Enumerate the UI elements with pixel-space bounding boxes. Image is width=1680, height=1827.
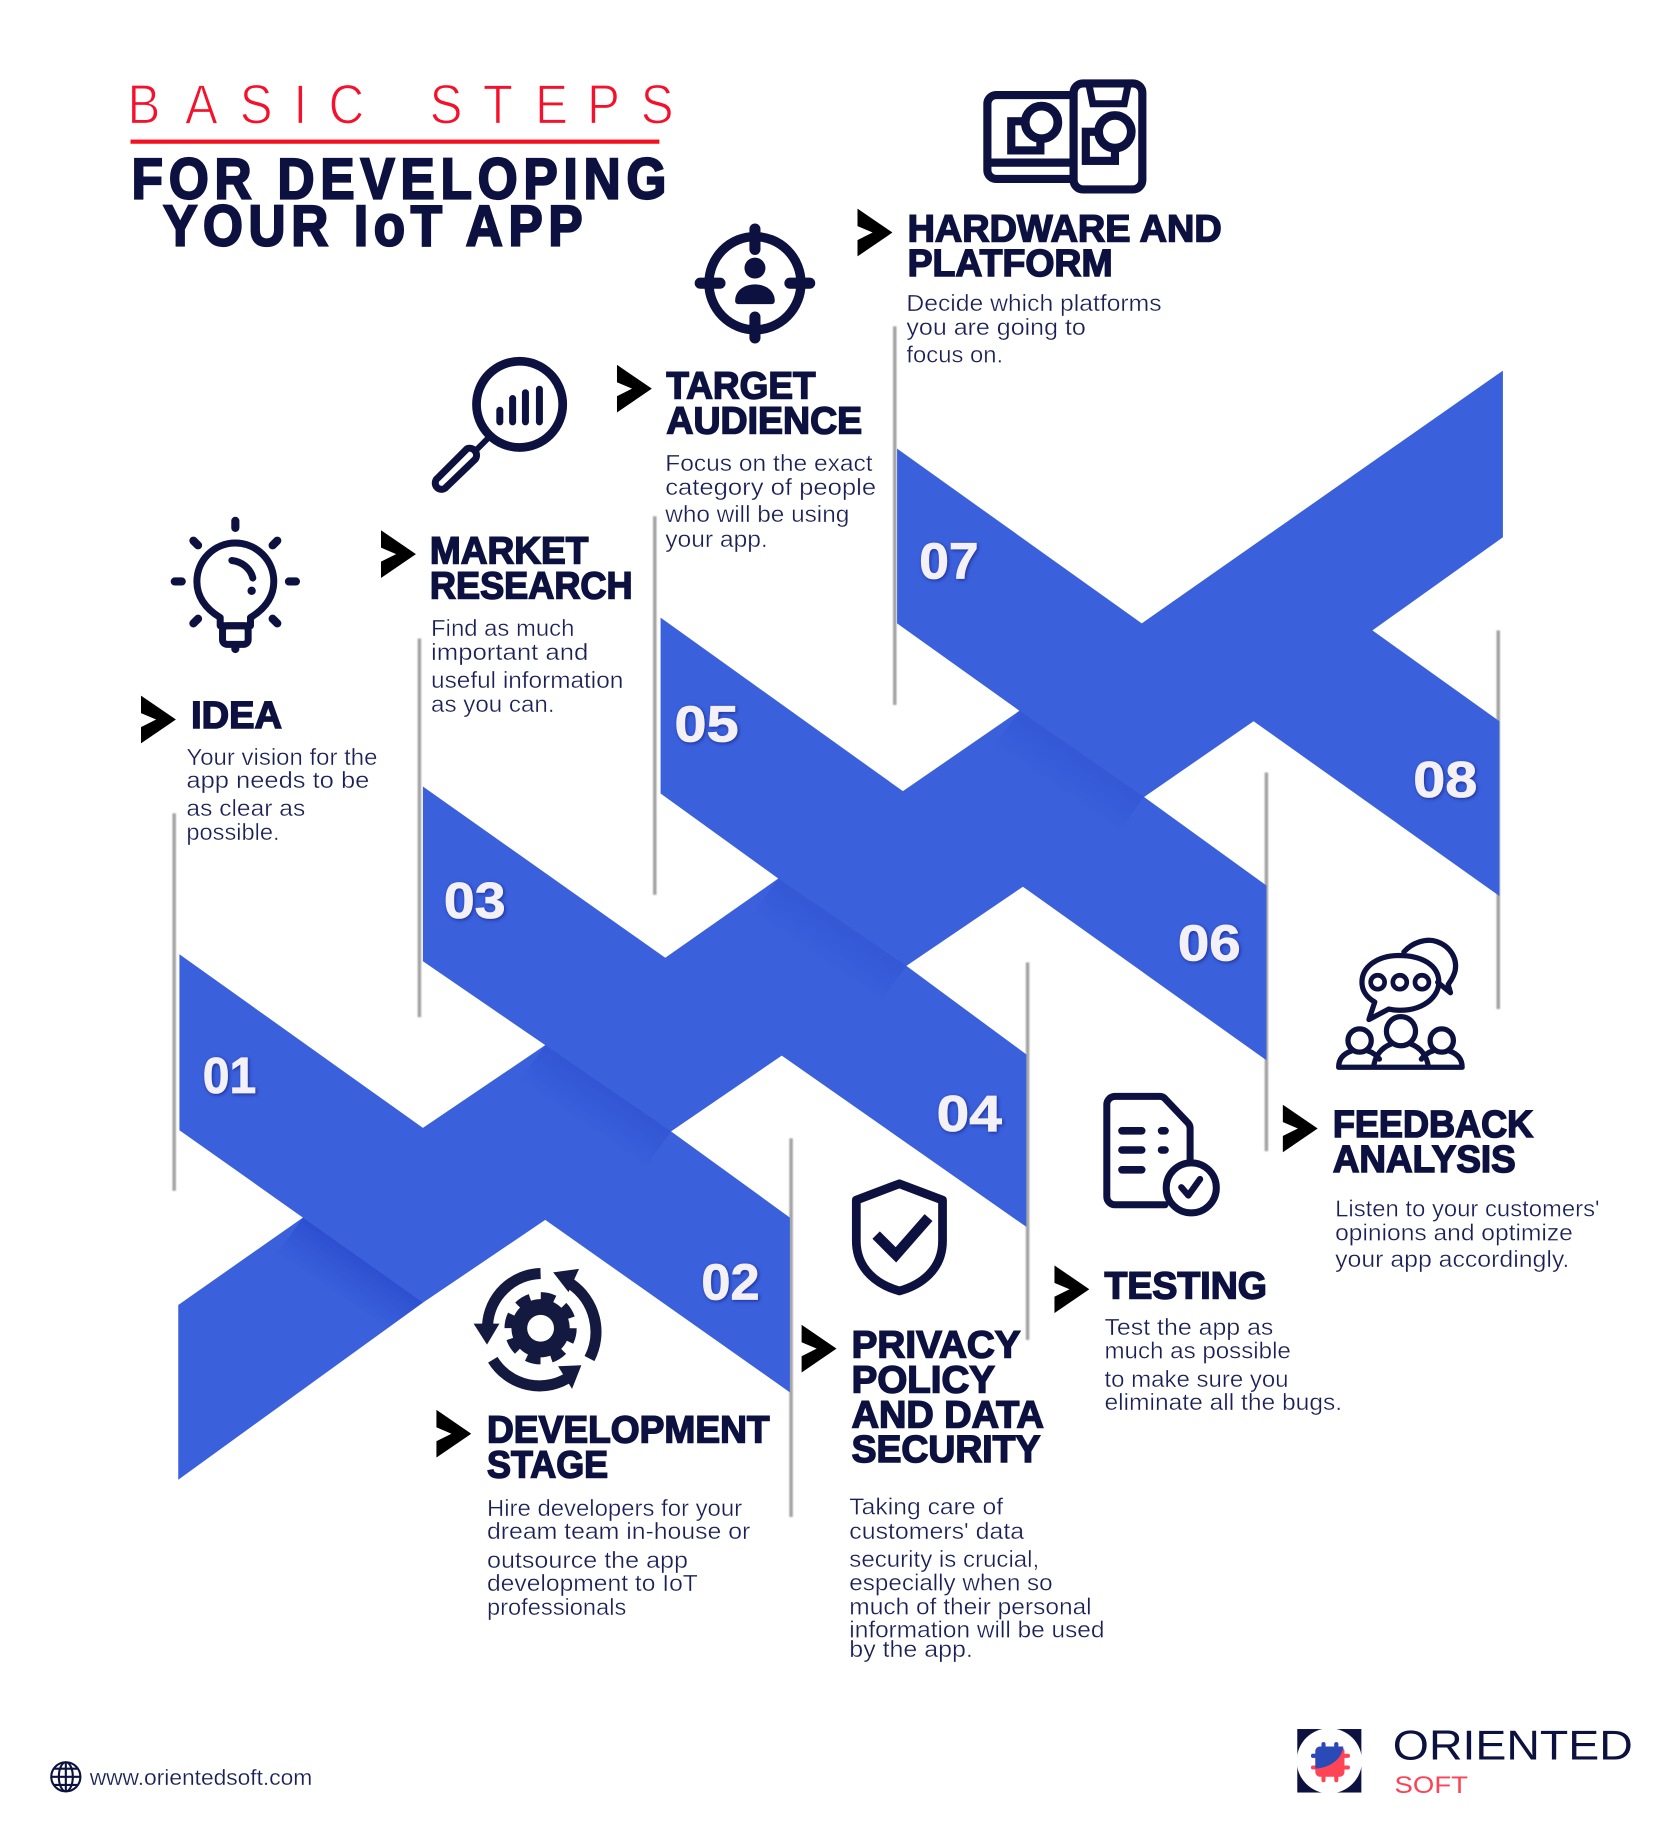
body text: Your vision for the	[186, 744, 377, 770]
body text: opinions and optimize	[1335, 1219, 1573, 1245]
heading	[1333, 1103, 1533, 1181]
body text: Focus on the exact	[665, 450, 873, 476]
website text: www.orientedsoft.com	[89, 1765, 312, 1790]
heading: IDEA	[191, 694, 282, 737]
step: feedback analysis	[1283, 940, 1600, 1272]
title: FOR DEVELOPING	[132, 146, 666, 211]
heading: FEEDBACK	[1333, 1103, 1533, 1146]
logo	[1297, 1721, 1633, 1799]
body text: category of people	[665, 474, 876, 500]
body text: app needs to be	[186, 767, 369, 793]
zigzag ribbon	[178, 371, 1503, 1480]
title: YOUR IoT APP	[163, 192, 583, 258]
arrow	[857, 209, 892, 256]
step numbers: 03	[444, 872, 506, 929]
body text: customers' data	[849, 1518, 1024, 1544]
step numbers: 08	[1413, 751, 1477, 808]
arrow	[141, 696, 176, 743]
body text: Hire developers for your	[487, 1495, 742, 1521]
body text: dream team in-house or	[487, 1518, 751, 1544]
body text: possible.	[186, 819, 280, 845]
body text: who will be using	[664, 501, 849, 527]
heading	[487, 1408, 770, 1486]
step numbers: 02	[701, 1254, 760, 1311]
step numbers	[203, 533, 1477, 1311]
body text: as clear as	[186, 795, 305, 821]
body text: professionals	[487, 1594, 626, 1620]
logo wordmark: ORIENTED	[1393, 1721, 1633, 1768]
body text: you are going to	[906, 314, 1086, 340]
body text: development to IoT	[487, 1570, 698, 1596]
body text: eliminate all the bugs.	[1104, 1389, 1342, 1415]
body text: outsource the app	[487, 1547, 688, 1573]
arrow	[617, 365, 652, 413]
body text: much of their personal	[849, 1593, 1092, 1619]
body text: as you can.	[431, 691, 555, 717]
heading	[852, 1323, 1044, 1471]
icon: magnifier with bars	[435, 361, 563, 489]
body text: much as possible	[1104, 1338, 1291, 1364]
step: idea	[141, 521, 377, 845]
body text: by the app.	[849, 1636, 973, 1662]
heading: MARKET	[430, 529, 589, 572]
arrow	[381, 530, 416, 578]
body text	[431, 615, 623, 717]
heading: HARDWARE AND	[908, 207, 1222, 250]
icon: tablet and phone	[987, 83, 1142, 189]
body text: Find as much	[431, 615, 574, 641]
step numbers: 07	[919, 533, 979, 590]
body text: Test the app as	[1104, 1314, 1273, 1340]
logo sub wordmark: SOFT	[1395, 1772, 1468, 1799]
step numbers: 06	[1178, 915, 1241, 972]
heading: DEVELOPMENT	[487, 1408, 770, 1451]
arrow	[802, 1325, 837, 1373]
body text: your app.	[665, 526, 768, 552]
body text	[849, 1494, 1104, 1662]
step numbers: 05	[675, 696, 739, 753]
body text	[1104, 1314, 1342, 1415]
heading: PRIVACY	[852, 1323, 1021, 1366]
heading: POLICY	[852, 1358, 995, 1401]
body text: Decide which platforms	[906, 290, 1162, 316]
step: testing	[1054, 1096, 1342, 1415]
body text	[906, 290, 1162, 367]
body text: focus on.	[906, 341, 1003, 367]
body text	[487, 1495, 751, 1620]
heading: ANALYSIS	[1333, 1138, 1516, 1181]
heading: TESTING	[1104, 1265, 1267, 1308]
step: hardware and platform	[857, 83, 1222, 367]
vertical shadow lines	[172, 326, 1500, 1517]
heading	[908, 207, 1222, 285]
icon: light bulb	[175, 521, 296, 653]
heading: RESEARCH	[430, 564, 633, 607]
heading: STAGE	[487, 1443, 608, 1486]
heading	[430, 529, 633, 607]
arrow	[436, 1410, 471, 1458]
step numbers: 01	[203, 1047, 256, 1104]
icon: people with speech bubbles	[1339, 940, 1462, 1067]
body text: your app accordingly.	[1335, 1246, 1569, 1272]
step: market research	[381, 361, 633, 717]
icon: globe	[51, 1762, 80, 1791]
heading: PLATFORM	[908, 242, 1113, 285]
logo mark	[1297, 1728, 1362, 1793]
heading: AND DATA	[852, 1393, 1044, 1436]
heading	[666, 365, 862, 442]
icon: gear with arrows	[474, 1269, 596, 1389]
body text: especially when so	[849, 1569, 1053, 1595]
body text	[664, 450, 876, 552]
icon: target with person	[700, 229, 810, 338]
icon: shield with check	[856, 1184, 943, 1291]
body text: information will be used	[849, 1617, 1104, 1643]
body text: important and	[431, 639, 588, 665]
title: BASICSTEPS	[128, 73, 674, 136]
body text	[186, 744, 377, 845]
heading: SECURITY	[852, 1428, 1041, 1471]
step: development stage	[436, 1269, 770, 1620]
body text: to make sure you	[1104, 1366, 1289, 1392]
heading: AUDIENCE	[666, 399, 862, 442]
body text: security is crucial,	[849, 1546, 1039, 1572]
body text: Listen to your customers'	[1335, 1195, 1600, 1221]
body text	[1335, 1195, 1600, 1272]
body text: Taking care of	[849, 1494, 1004, 1520]
arrow	[1054, 1265, 1089, 1313]
footer website	[51, 1762, 312, 1791]
step: privacy policy and data security	[802, 1184, 1104, 1662]
body text: useful information	[431, 667, 623, 693]
step numbers: 04	[937, 1085, 1002, 1142]
icon: document with check badge	[1107, 1096, 1216, 1213]
heading: TARGET	[666, 365, 816, 408]
title	[128, 73, 674, 258]
arrow	[1283, 1105, 1318, 1152]
step: target audience	[617, 229, 876, 552]
